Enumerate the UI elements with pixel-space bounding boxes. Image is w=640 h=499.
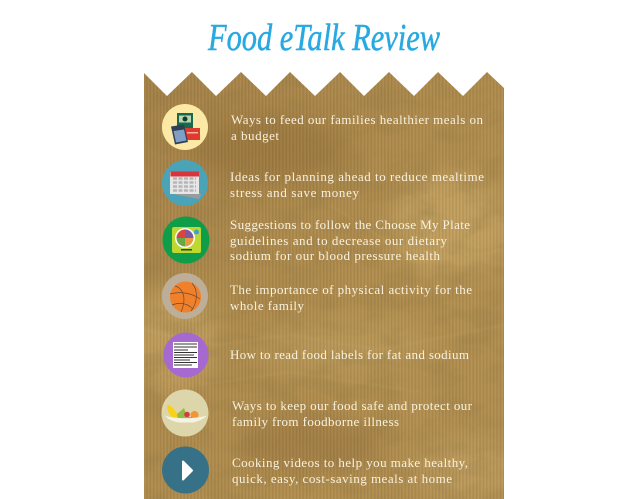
- text: choose my plate: guidelines and to decrease our dietary: [230, 233, 448, 248]
- text: choose my plate: [230, 217, 470, 263]
- text: budget meals: [231, 112, 484, 143]
- text: planning ahead: stress and save money: [230, 185, 360, 200]
- text: planning ahead: Ideas for planning ahead to reduce mealtime: [230, 169, 484, 184]
- title: Food eTalk Review: [207, 17, 441, 59]
- text: physical activity: The importance of physical activity for the: [230, 282, 472, 297]
- icon: money and calculator: [162, 104, 208, 150]
- icon: basketball: [162, 273, 208, 319]
- panel: kraft paper: [144, 72, 504, 499]
- icon: nutrition label: [164, 332, 208, 378]
- text: physical activity: whole family: [230, 298, 304, 313]
- icon: fruit bowl: [162, 390, 208, 436]
- text: food safety: [232, 398, 473, 429]
- icon: my plate: [162, 216, 210, 264]
- text: choose my plate: sodium for our blood pressure health: [230, 248, 440, 263]
- text: physical activity: [230, 282, 472, 313]
- text: cooking videos: [232, 455, 468, 486]
- icon: play video: [162, 446, 209, 494]
- text: food safety: Ways to keep our food safe and protect our: [232, 398, 473, 413]
- text: cooking videos: Cooking videos to help you make healthy,: [232, 455, 468, 470]
- text: cooking videos: quick, easy, cost-saving meals at home: [232, 471, 452, 486]
- text: budget meals: Ways to feed our families healthier meals on: [231, 112, 484, 127]
- text: budget meals: a budget: [231, 128, 279, 143]
- text: choose my plate: Suggestions to follow the Choose My Plate: [230, 217, 470, 232]
- text: planning ahead: [230, 169, 484, 200]
- text: food safety: family from foodborne illness: [232, 414, 399, 429]
- icon: calendar: [162, 160, 208, 206]
- torn zigzag edge: [144, 60, 504, 96]
- text: food labels: How to read food labels for fat and sodium: [230, 347, 469, 362]
